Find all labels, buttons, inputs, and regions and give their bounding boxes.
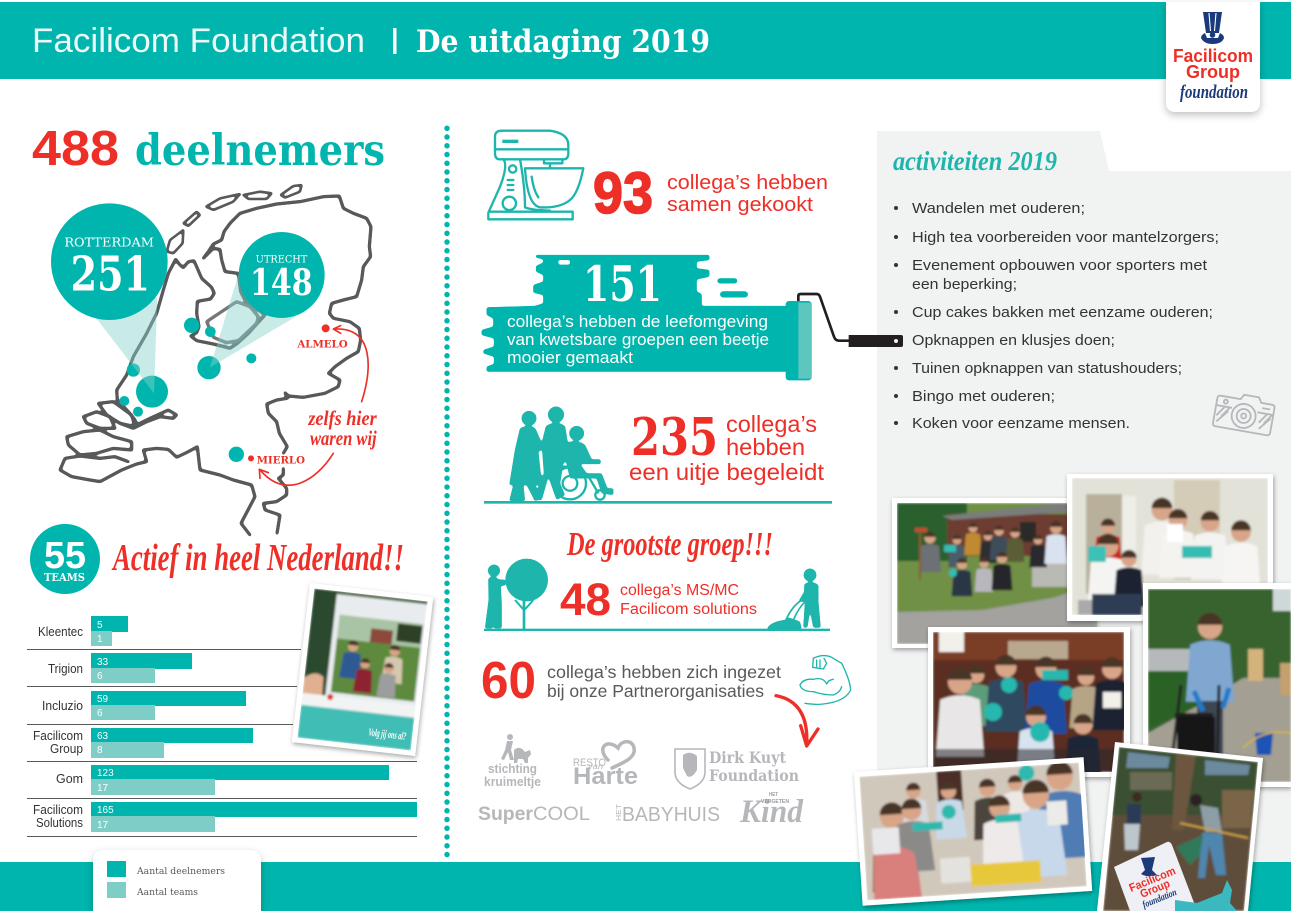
row: Facilicom Group: 63: [97, 731, 109, 742]
map of the Netherlands: [51, 185, 378, 535]
row: Trigion: 33: [97, 657, 109, 668]
stat: 60 collega's Partnerorganisaties: [481, 652, 781, 710]
logo: Het Vergeten Kind: HET: [769, 792, 778, 798]
callout: Rotterdam 251: [51, 203, 168, 320]
photo: team with rake outside brick building: [892, 498, 1097, 648]
heading: 488 deelnemers: [32, 122, 385, 176]
roller handle: [798, 294, 903, 347]
stat: 60 collega's Partnerorganisaties: bij onze Partnerorganisaties: [547, 681, 764, 701]
row: Trigion: 6: [97, 671, 103, 682]
badge: 55 teams: TEAMS: [44, 571, 85, 584]
row: Incluzio: 59: [97, 694, 109, 705]
photo caption: Volg jij ons al?: [368, 727, 407, 743]
row: Facilicom Group: Group: [50, 741, 83, 756]
paint roller banner: [482, 255, 903, 380]
activity list: Koken voor eenzame mensen.: [912, 415, 1130, 432]
row: Kleentec: Kleentec: [38, 624, 83, 639]
logo: Het Babyhuis: BABYHUIS: [622, 804, 720, 826]
activity list: Tuinen opknappen van statushouders;: [912, 360, 1182, 377]
logo: SuperCOOL: Super: [478, 804, 534, 825]
script note: zelfs hier waren wij: zelfs hier: [307, 408, 378, 430]
header subtitle: De uitdaging 2019: [416, 24, 710, 60]
activity list: Cup cakes bakken met eenzame ouderen;: [912, 304, 1213, 321]
icon: chef hat: [1201, 12, 1224, 44]
paint highlight: [558, 260, 570, 265]
row: Gom: 17: [97, 783, 109, 794]
logo wordmark: Facilicom: [1173, 45, 1253, 66]
callout cones: [95, 272, 296, 393]
stat: 60 collega's Partnerorganisaties: collega’s hebben zich ingezet: [547, 662, 781, 682]
logo: Dirk Kuyt Foundation: Dirk Kuyt: [709, 748, 787, 767]
logo: Resto van Harte: RESTO: [573, 757, 606, 769]
logo card: [1166, 2, 1260, 112]
arrows to Almelo and Mierlo: [259, 326, 368, 485]
logo: stichting kruimeltje: [484, 734, 541, 789]
sign card: Group: [1139, 878, 1172, 901]
row: Facilicom Group: Facilicom: [33, 728, 83, 743]
red location labels: ALMELO: [296, 337, 348, 350]
row: Kleentec: 5: [97, 620, 103, 631]
photo: gardening with Facilicom sign: [1097, 742, 1263, 911]
banner text: mooier gemaakt: [507, 349, 633, 367]
activity list: Wandelen met ouderen;: [912, 200, 1085, 217]
callout: Rotterdam 251: ROTTERDAM: [64, 236, 154, 250]
number 151: 151: [583, 255, 662, 313]
heading: 488 deelnemers: 488: [32, 122, 119, 176]
red location labels: MIERLO: [257, 453, 305, 466]
banner text: [507, 313, 769, 367]
logo: Dirk Kuyt Foundation: Foundation: [709, 766, 799, 785]
panel: activiteiten 2019: [877, 131, 1291, 862]
stat: 48 collega's MS/MC Facilicom solutions: collega’s MS/MC: [620, 582, 739, 599]
logo card: Group: [1186, 61, 1240, 82]
activity list: een beperking;: [912, 276, 1017, 293]
row: Facilicom Solutions: Facilicom: [33, 802, 83, 817]
row: Facilicom Group: 8: [97, 745, 103, 756]
stat: 235 collega's hebben een uitje begeleid: collega’s: [726, 411, 817, 437]
activity list: High tea voorbereiden voor mantelzorgers;: [912, 229, 1219, 246]
script note: zelfs hier waren wij: waren wij: [310, 428, 377, 450]
chart legend: Aantal deelnemers: [136, 866, 225, 877]
header title: Facilicom Foundation: [32, 22, 365, 60]
banner text: collega’s hebben de leefomgeving: [507, 313, 768, 331]
logo: Het Vergeten Kind: VERGETEN: [761, 799, 789, 805]
logo: SuperCOOL: COOL: [533, 804, 590, 825]
row: Facilicom Solutions: Solutions: [36, 815, 83, 830]
row: Incluzio: Incluzio: [42, 698, 83, 713]
badge: 55 teams: [30, 524, 100, 594]
logo: Het Vergeten Kind: Kind: [739, 794, 803, 830]
ground line: [484, 501, 832, 504]
stat: 93 collega's hebben samen gekookt: [593, 161, 828, 226]
stat: 235 collega's hebben een uitje begeleid: [629, 408, 825, 485]
row: Trigion: Trigion: [48, 661, 83, 676]
thumb sign: [1175, 880, 1237, 911]
logo: Het Babyhuis: HET: [616, 803, 623, 821]
badge: 55 teams: 55: [44, 535, 86, 577]
row: Gom: 123: [97, 768, 114, 779]
chart legend: [93, 850, 261, 911]
photo: man cleaning walker outdoors: [1143, 583, 1291, 787]
heading: 488 deelnemers: deelnemers: [135, 126, 385, 176]
row: Facilicom Solutions: 165: [97, 805, 114, 816]
script heading: De grootste groep: De grootste groep!!!: [566, 526, 773, 563]
row: Facilicom Solutions: [33, 802, 417, 832]
logo: Dirk Kuyt Foundation: [675, 748, 799, 789]
row: Kleentec: 1: [97, 634, 103, 645]
stat: 235 collega's hebben een uitje begeleid: een uitje begeleidt: [629, 459, 825, 485]
header band: [0, 2, 1291, 79]
bar chart: deelnemers and teams per company: [27, 616, 417, 836]
ground line: [484, 629, 830, 631]
callout: Rotterdam 251: 251: [71, 248, 150, 303]
row: Kleentec: [38, 616, 128, 646]
activity list: [894, 200, 1219, 432]
icon: flexed arm: [800, 656, 851, 704]
logo: SuperCOOL: [478, 804, 590, 825]
partner logos: [478, 734, 803, 830]
icon: camera: [1212, 390, 1276, 436]
row: Trigion: [48, 653, 192, 683]
photo: group with smiley signs: [928, 627, 1132, 783]
paint stroke shape: [482, 255, 790, 372]
sign card: [1114, 842, 1197, 911]
row: Incluzio: 6: [97, 708, 103, 719]
icon: carers with wheelchair: [484, 407, 832, 504]
callout: Utrecht 148: [239, 232, 325, 318]
icons: gardener and mower: [484, 559, 830, 631]
activity list: Opknappen en klusjes doen;: [912, 332, 1115, 349]
stat: 48 collega's MS/MC Facilicom solutions: [560, 574, 757, 625]
photo: team in kitchen with signs: [854, 757, 1094, 906]
logo card: foundation: [1180, 82, 1248, 103]
sign card: foundation: [1141, 887, 1179, 911]
chart legend: Aantal teams: [136, 887, 198, 898]
row: Incluzio: [42, 691, 246, 720]
sign card: Facilicom: [1128, 865, 1178, 895]
stat: 60 collega's Partnerorganisaties: 60: [481, 652, 536, 710]
stat: 235 collega's hebben een uitje begeleid: hebben: [726, 434, 805, 460]
logo: Resto van Harte: [573, 742, 638, 790]
banner text: van kwetsbare groepen een beetje: [507, 331, 769, 349]
footer band: [0, 862, 1291, 911]
activity list: Bingo met ouderen;: [912, 388, 1055, 405]
row: Facilicom Group: [33, 728, 253, 758]
red location labels: [248, 324, 348, 466]
logo: stichting kruimeltje: kruimeltje: [484, 775, 541, 789]
script note: zelfs hier waren wij: [307, 408, 378, 450]
row: Facilicom Solutions: 17: [97, 820, 109, 831]
row: Gom: [56, 765, 389, 795]
photo: painters in white shirts: [1067, 474, 1273, 621]
icon: stand mixer: [488, 131, 583, 219]
row: Gom: Gom: [56, 771, 83, 786]
script heading: Actief in heel Nederland: Actief in heel Nederland!!: [112, 537, 404, 579]
arrow: red down to partners: [776, 696, 818, 746]
roller: [786, 301, 812, 380]
dotted divider: [444, 128, 450, 860]
callout: Utrecht 148: 148: [250, 262, 313, 304]
photo: Instagram frame with elderly group: [292, 583, 433, 756]
stat: 235 collega's hebben een uitje begeleid: 235: [631, 408, 718, 468]
stat: 93 collega's hebben samen gekookt: samen gekookt: [667, 194, 813, 216]
city markers: [119, 318, 256, 462]
logo: Resto van Harte: Harte: [573, 763, 638, 790]
panel heading: activiteiten 2019: [893, 146, 1057, 176]
logo: stichting kruimeltje: stichting: [488, 762, 537, 776]
stat: 93 collega's hebben samen gekookt: 93: [593, 161, 653, 226]
stat: 48 collega's MS/MC Facilicom solutions: Facilicom solutions: [620, 601, 757, 618]
callout: Utrecht 148: UTRECHT: [256, 252, 307, 265]
activity list: Evenement opbouwen voor sporters met: [912, 257, 1208, 274]
logo: Resto van Harte: van: [588, 762, 604, 771]
stat: 93 collega's hebben samen gekookt: collega’s hebben: [667, 172, 828, 194]
stat: 48 collega's MS/MC Facilicom solutions: 48: [560, 574, 611, 625]
